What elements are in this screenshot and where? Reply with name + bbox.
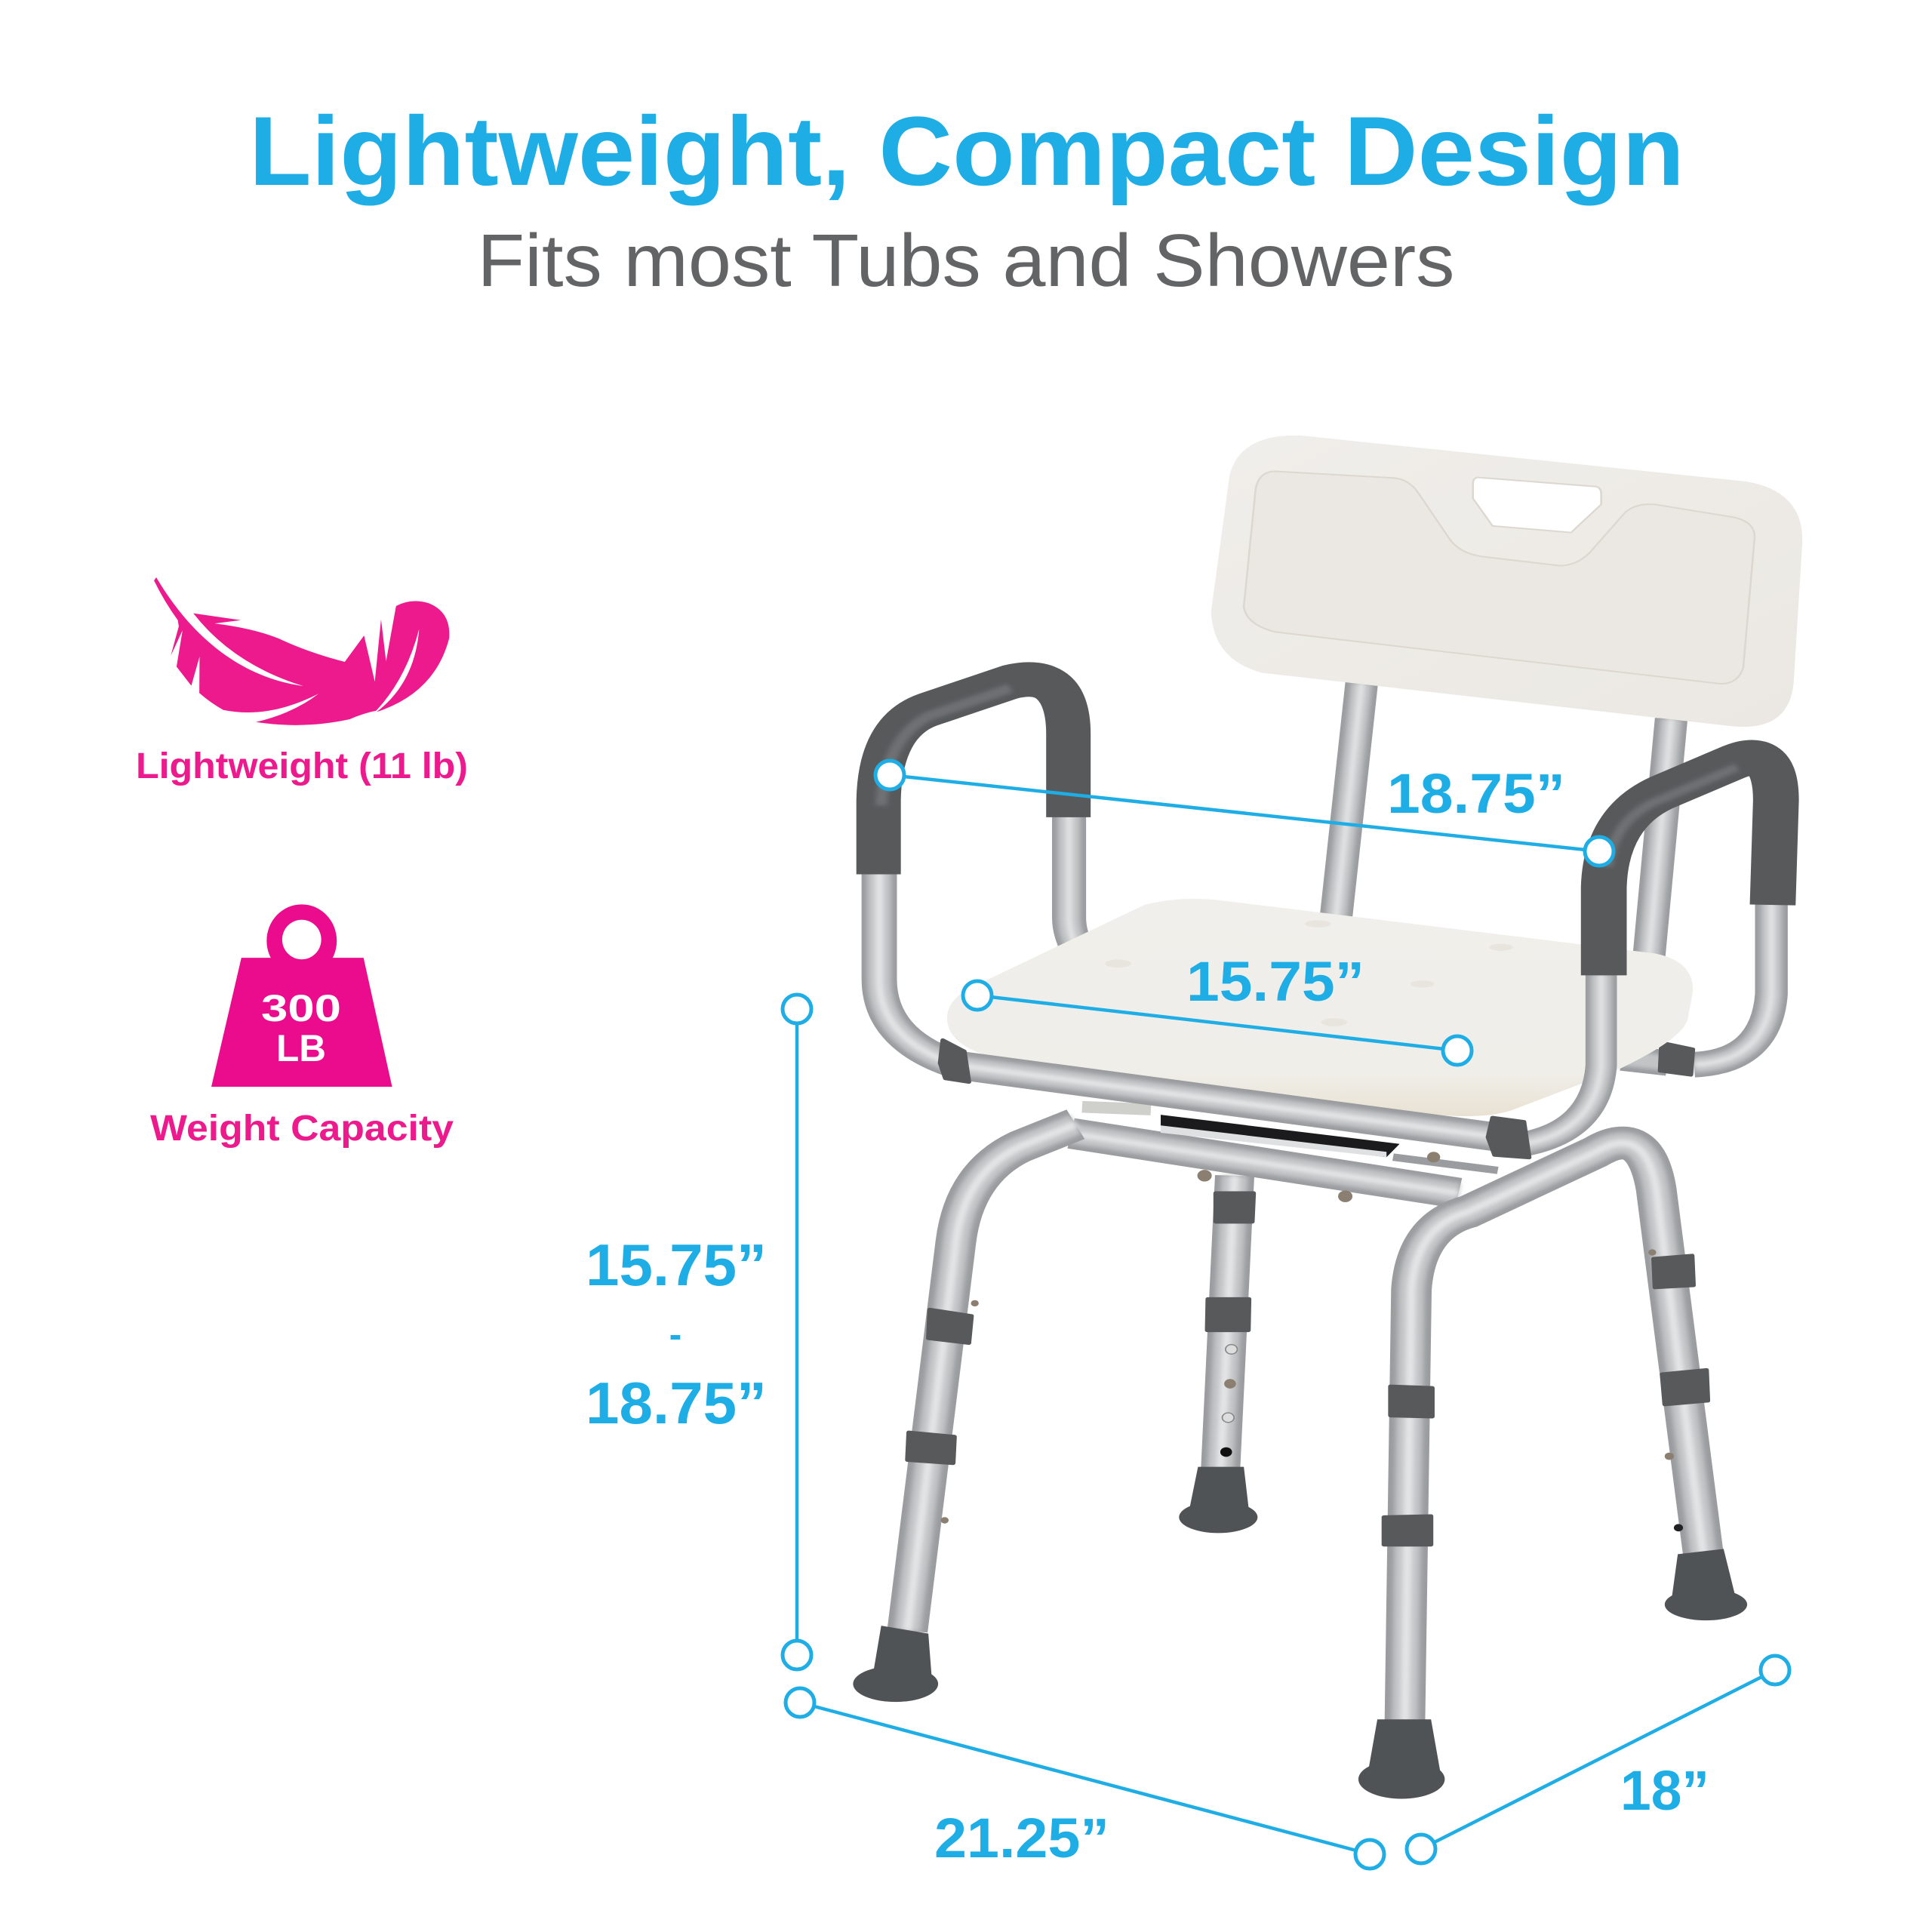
right armrest: [1488, 758, 1776, 1158]
dimension: seat height: [586, 995, 811, 1669]
seat rail: [961, 1066, 1504, 1138]
icon: weight 300 lb: LB: [276, 1027, 326, 1069]
dimension: seat height: 15.75”: [586, 1232, 767, 1298]
dimension: base depth: [1407, 1656, 1789, 1863]
dimension: seat depth: [963, 950, 1472, 1065]
dimension: arm width: 18.75”: [1387, 762, 1565, 825]
dimension: arm width: [875, 761, 1614, 866]
cross frame and swivel plate: [1071, 1107, 1498, 1202]
dimension: base width: [786, 1688, 1384, 1869]
icon: feather: [154, 577, 449, 725]
dimension: seat height: 18.75”: [586, 1370, 767, 1436]
icon: weight 300 lb: 300: [261, 987, 341, 1029]
dimension: seat depth: 15.75”: [1186, 950, 1364, 1013]
label: lightweight: Lightweight (11 lb): [136, 746, 468, 786]
right legs and arch: [1358, 1143, 1747, 1799]
front left leg: [853, 1124, 1075, 1702]
dimension: base width: 21.25”: [934, 1807, 1109, 1869]
rear arm tubes: [1069, 813, 1771, 1075]
seat: [947, 899, 1693, 1116]
icon: weight 300 lb: [211, 904, 392, 1087]
title: Lightweight, Compact Design: [249, 96, 1684, 206]
label: weight capacity: Weight Capacity: [150, 1109, 454, 1149]
dimension: seat height: -: [669, 1313, 681, 1355]
rear centre leg: [1179, 1176, 1257, 1533]
subtitle: Fits most Tubs and Showers: [477, 219, 1455, 302]
backrest: [1211, 435, 1802, 727]
left armrest: [878, 679, 1069, 1082]
chair lower frame and legs: [853, 1107, 1747, 1799]
dimension: base depth: 18”: [1620, 1759, 1709, 1822]
chair upper: [878, 435, 1802, 1158]
backrest posts: [1336, 683, 1671, 964]
